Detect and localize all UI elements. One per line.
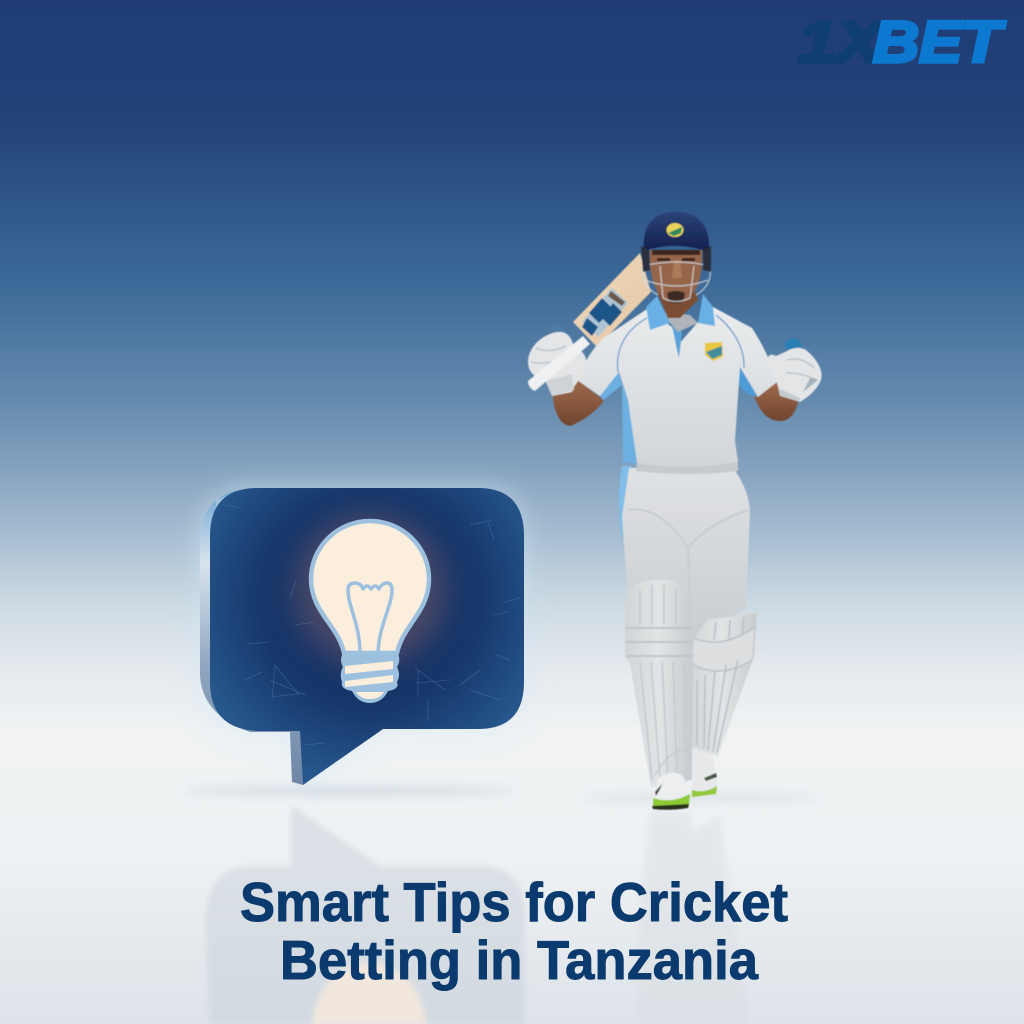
right leg pad: [689, 613, 757, 756]
cricket player: [528, 212, 822, 810]
floor reflection of player: [636, 812, 748, 1024]
bubble front face: [210, 488, 524, 785]
trousers: [622, 465, 750, 665]
light bulb glow: [294, 514, 446, 666]
shirt collar: [646, 294, 715, 358]
speech bubble with light bulb icon: [200, 488, 524, 785]
sleeve and side panels: [598, 368, 638, 464]
title: Smart Tips for Cricket: [240, 871, 788, 933]
front shoe: [652, 772, 690, 810]
left glove: [528, 325, 586, 396]
1XBET logo: [798, 10, 1006, 75]
right glove: [767, 338, 822, 402]
bat blade: [573, 253, 651, 347]
floor shadows: [185, 788, 820, 802]
chest badge: [705, 342, 723, 361]
1XBET logo: BET: [873, 10, 1006, 75]
title: [240, 871, 788, 991]
shirt: [577, 307, 777, 467]
arm right: [754, 382, 798, 421]
helmet badge: [666, 223, 684, 237]
helmet grille: [643, 262, 710, 302]
light bulb: [311, 521, 429, 703]
floor reflection of speech bubble: [205, 805, 525, 1024]
bubble scratches: [225, 505, 520, 745]
neck: [657, 292, 698, 318]
bat handle: [528, 336, 590, 391]
1XBET logo: 1X: [798, 10, 886, 75]
shirt seams: [617, 315, 744, 372]
bubble side extrusion: [200, 489, 310, 785]
title: Betting in Tanzania: [280, 929, 758, 991]
waistband: [636, 462, 738, 474]
arm left: [553, 380, 604, 426]
trouser folds: [628, 509, 748, 635]
back shoe: [692, 748, 717, 797]
left leg pad: [625, 580, 693, 787]
trouser side stripe: [619, 466, 632, 540]
bulb screw base: [341, 653, 399, 703]
bubble glow: [200, 488, 524, 785]
face: [650, 250, 702, 304]
bulb filament: [348, 583, 392, 653]
helmet: [641, 212, 711, 272]
